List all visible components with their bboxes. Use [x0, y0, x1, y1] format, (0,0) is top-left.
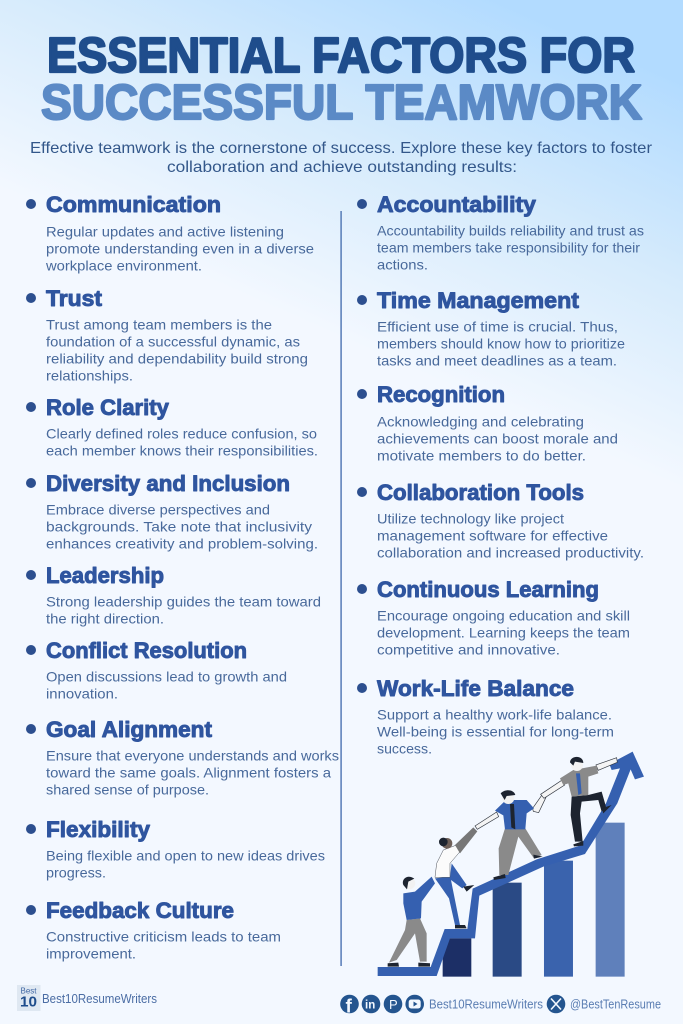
- panel: leadership: [26, 563, 321, 626]
- body text: Embrace diverse perspectives and: [46, 502, 270, 518]
- body text: [46, 426, 318, 458]
- heading: Role Clarity: [46, 395, 170, 420]
- bullet: [26, 402, 36, 412]
- body text: [46, 502, 318, 552]
- handle: x: @BestTenResume: [570, 996, 661, 1012]
- title: [41, 29, 642, 130]
- intro text: Effective teamwork is the cornerstone of success. Explore these key factors to foster: [30, 140, 653, 157]
- icon: linkedin: [362, 995, 380, 1013]
- arrow: [378, 752, 644, 976]
- heading: Conflict Resolution: [46, 638, 247, 663]
- body text: toward the same goals. Alignment fosters a: [46, 764, 331, 780]
- heading: Leadership: [46, 563, 164, 588]
- body text: [377, 706, 614, 756]
- icon: facebook: [340, 995, 359, 1018]
- body text: Support a healthy work-life balance.: [377, 706, 612, 722]
- bullet: [357, 584, 367, 594]
- handle: facebook, linkedin, pinterest, youtube: Best10ResumeWriters: [429, 996, 543, 1012]
- bar chart: [443, 823, 625, 977]
- body text: [45, 224, 314, 274]
- heading: Accountability: [377, 192, 537, 217]
- body text: motivate members to do better.: [377, 448, 586, 464]
- body text: [46, 668, 287, 702]
- panel: work-life balance: [357, 676, 614, 756]
- body text: Well-being is essential for long-term: [377, 724, 614, 740]
- panel: time management: [357, 288, 625, 368]
- intro text: collaboration and achieve outstanding results:: [167, 159, 517, 176]
- bullet: [26, 570, 36, 580]
- body text: [377, 318, 625, 368]
- body text: each member knows their responsibilities.: [46, 442, 318, 458]
- panel: feedback culture: [26, 898, 281, 962]
- logo wordmark: Best10ResumeWriters: [42, 991, 157, 1006]
- body text: Encourage ongoing education and skill: [377, 608, 630, 624]
- heading: Trust: [46, 286, 103, 311]
- body text: promote understanding even in a diverse: [46, 240, 314, 256]
- body text: Efficient use of time is crucial. Thus,: [377, 318, 618, 334]
- body text: reliability and dependability build strong: [46, 350, 308, 366]
- icon: x: [547, 995, 565, 1013]
- body text: collaboration and increased productivity.: [377, 544, 644, 560]
- body text: Ensure that everyone understands and works: [46, 748, 339, 764]
- body text: [377, 510, 644, 560]
- heading: Recognition: [377, 382, 505, 407]
- body text: achievements can boost morale and: [377, 430, 618, 446]
- body text: backgrounds. Take note that inclusivity: [46, 518, 312, 534]
- bullet: [357, 389, 367, 399]
- body text: Strong leadership guides the team toward: [46, 594, 321, 610]
- body text: Trust among team members is the: [46, 316, 272, 332]
- bullet: [357, 487, 367, 497]
- body text: progress.: [46, 864, 106, 880]
- body text: competitive and innovative.: [377, 642, 560, 658]
- heading: Collaboration Tools: [377, 480, 584, 505]
- body text: [46, 848, 325, 880]
- body text: [46, 594, 321, 626]
- body text: team members take responsibility for their: [377, 240, 640, 256]
- body text: actions.: [377, 256, 428, 272]
- body text: success.: [377, 740, 432, 756]
- icon: facebook: f: [346, 996, 352, 1018]
- panel: role clarity: [26, 395, 318, 458]
- panel: goal alignment: [26, 717, 339, 798]
- body text: innovation.: [46, 686, 118, 702]
- body text: relationships.: [46, 368, 133, 384]
- heading: Flexibility: [46, 817, 151, 842]
- body text: [377, 608, 630, 658]
- panel: continuous learning: [357, 577, 630, 658]
- bullet: [26, 645, 36, 655]
- bullet: [357, 683, 367, 693]
- panel: diversity and inclusion: [26, 471, 318, 552]
- body text: Open discussions lead to growth and: [46, 668, 287, 684]
- body text: improvement.: [46, 946, 136, 962]
- illustration: team climbing a rising bar chart: [378, 752, 644, 977]
- body text: Regular updates and active listening: [46, 224, 284, 240]
- icon: pinterest: [384, 995, 402, 1013]
- bullet: [26, 199, 36, 209]
- icon: youtube: [405, 995, 424, 1013]
- heading: Communication: [46, 192, 221, 217]
- body text: Constructive criticism leads to team: [46, 928, 281, 944]
- body text: [377, 222, 644, 272]
- person 3: [475, 790, 546, 880]
- person 2: [435, 827, 477, 928]
- panel: trust: [26, 286, 308, 384]
- panel: accountability: [357, 192, 644, 272]
- icon: linkedin: in: [365, 1000, 375, 1012]
- body text: [46, 748, 339, 798]
- social links: [340, 995, 661, 1018]
- body text: the right direction.: [46, 610, 164, 626]
- heading: Continuous Learning: [377, 577, 599, 602]
- body text: workplace environment.: [45, 258, 202, 274]
- panel: conflict resolution: [26, 638, 287, 702]
- title: SUCCESSFUL TEAMWORK: [41, 76, 642, 130]
- logo mark: [17, 985, 40, 1011]
- panel: recognition: [357, 382, 618, 464]
- bullet: [26, 293, 36, 303]
- logo mark: Best: [20, 986, 37, 996]
- bullet: [26, 905, 36, 915]
- body text: enhances creativity and problem-solving.: [46, 536, 318, 552]
- body text: foundation of a successful dynamic, as: [46, 334, 300, 350]
- panel: flexibility: [26, 817, 325, 880]
- body text: Utilize technology like project: [377, 510, 564, 526]
- bullet: [26, 824, 36, 834]
- body text: Acknowledging and celebrating: [377, 414, 584, 430]
- bullet: [26, 724, 36, 734]
- panel: communication: [26, 192, 314, 274]
- body text: Clearly defined roles reduce confusion, so: [46, 426, 317, 442]
- title: ESSENTIAL FACTORS FOR: [47, 29, 635, 83]
- body text: development. Learning keeps the team: [377, 624, 630, 640]
- body text: Accountability builds reliability and trust as: [377, 222, 644, 238]
- person 4: [541, 757, 617, 846]
- heading: Work-Life Balance: [377, 676, 574, 701]
- person 1: [388, 877, 435, 967]
- body text: members should know how to prioritize: [377, 336, 625, 352]
- logo: Best10ResumeWriters: [17, 985, 157, 1011]
- body text: [46, 928, 281, 962]
- body text: [377, 414, 618, 464]
- body text: tasks and meet deadlines as a team.: [377, 352, 617, 368]
- bullet: [357, 199, 367, 209]
- body text: management software for effective: [377, 528, 608, 544]
- body text: shared sense of purpose.: [46, 782, 209, 798]
- body text: Being flexible and open to new ideas drives: [46, 848, 325, 864]
- logo mark: 10: [20, 994, 37, 1010]
- icon: pinterest: P: [389, 997, 398, 1012]
- heading: Goal Alignment: [46, 717, 213, 742]
- panel: collaboration tools: [357, 480, 644, 560]
- bullet: [357, 295, 367, 305]
- body text: [46, 316, 308, 384]
- heading: Time Management: [377, 288, 580, 313]
- heading: Feedback Culture: [46, 898, 234, 923]
- bullet: [26, 478, 36, 488]
- intro text: [30, 140, 653, 176]
- heading: Diversity and Inclusion: [46, 471, 290, 496]
